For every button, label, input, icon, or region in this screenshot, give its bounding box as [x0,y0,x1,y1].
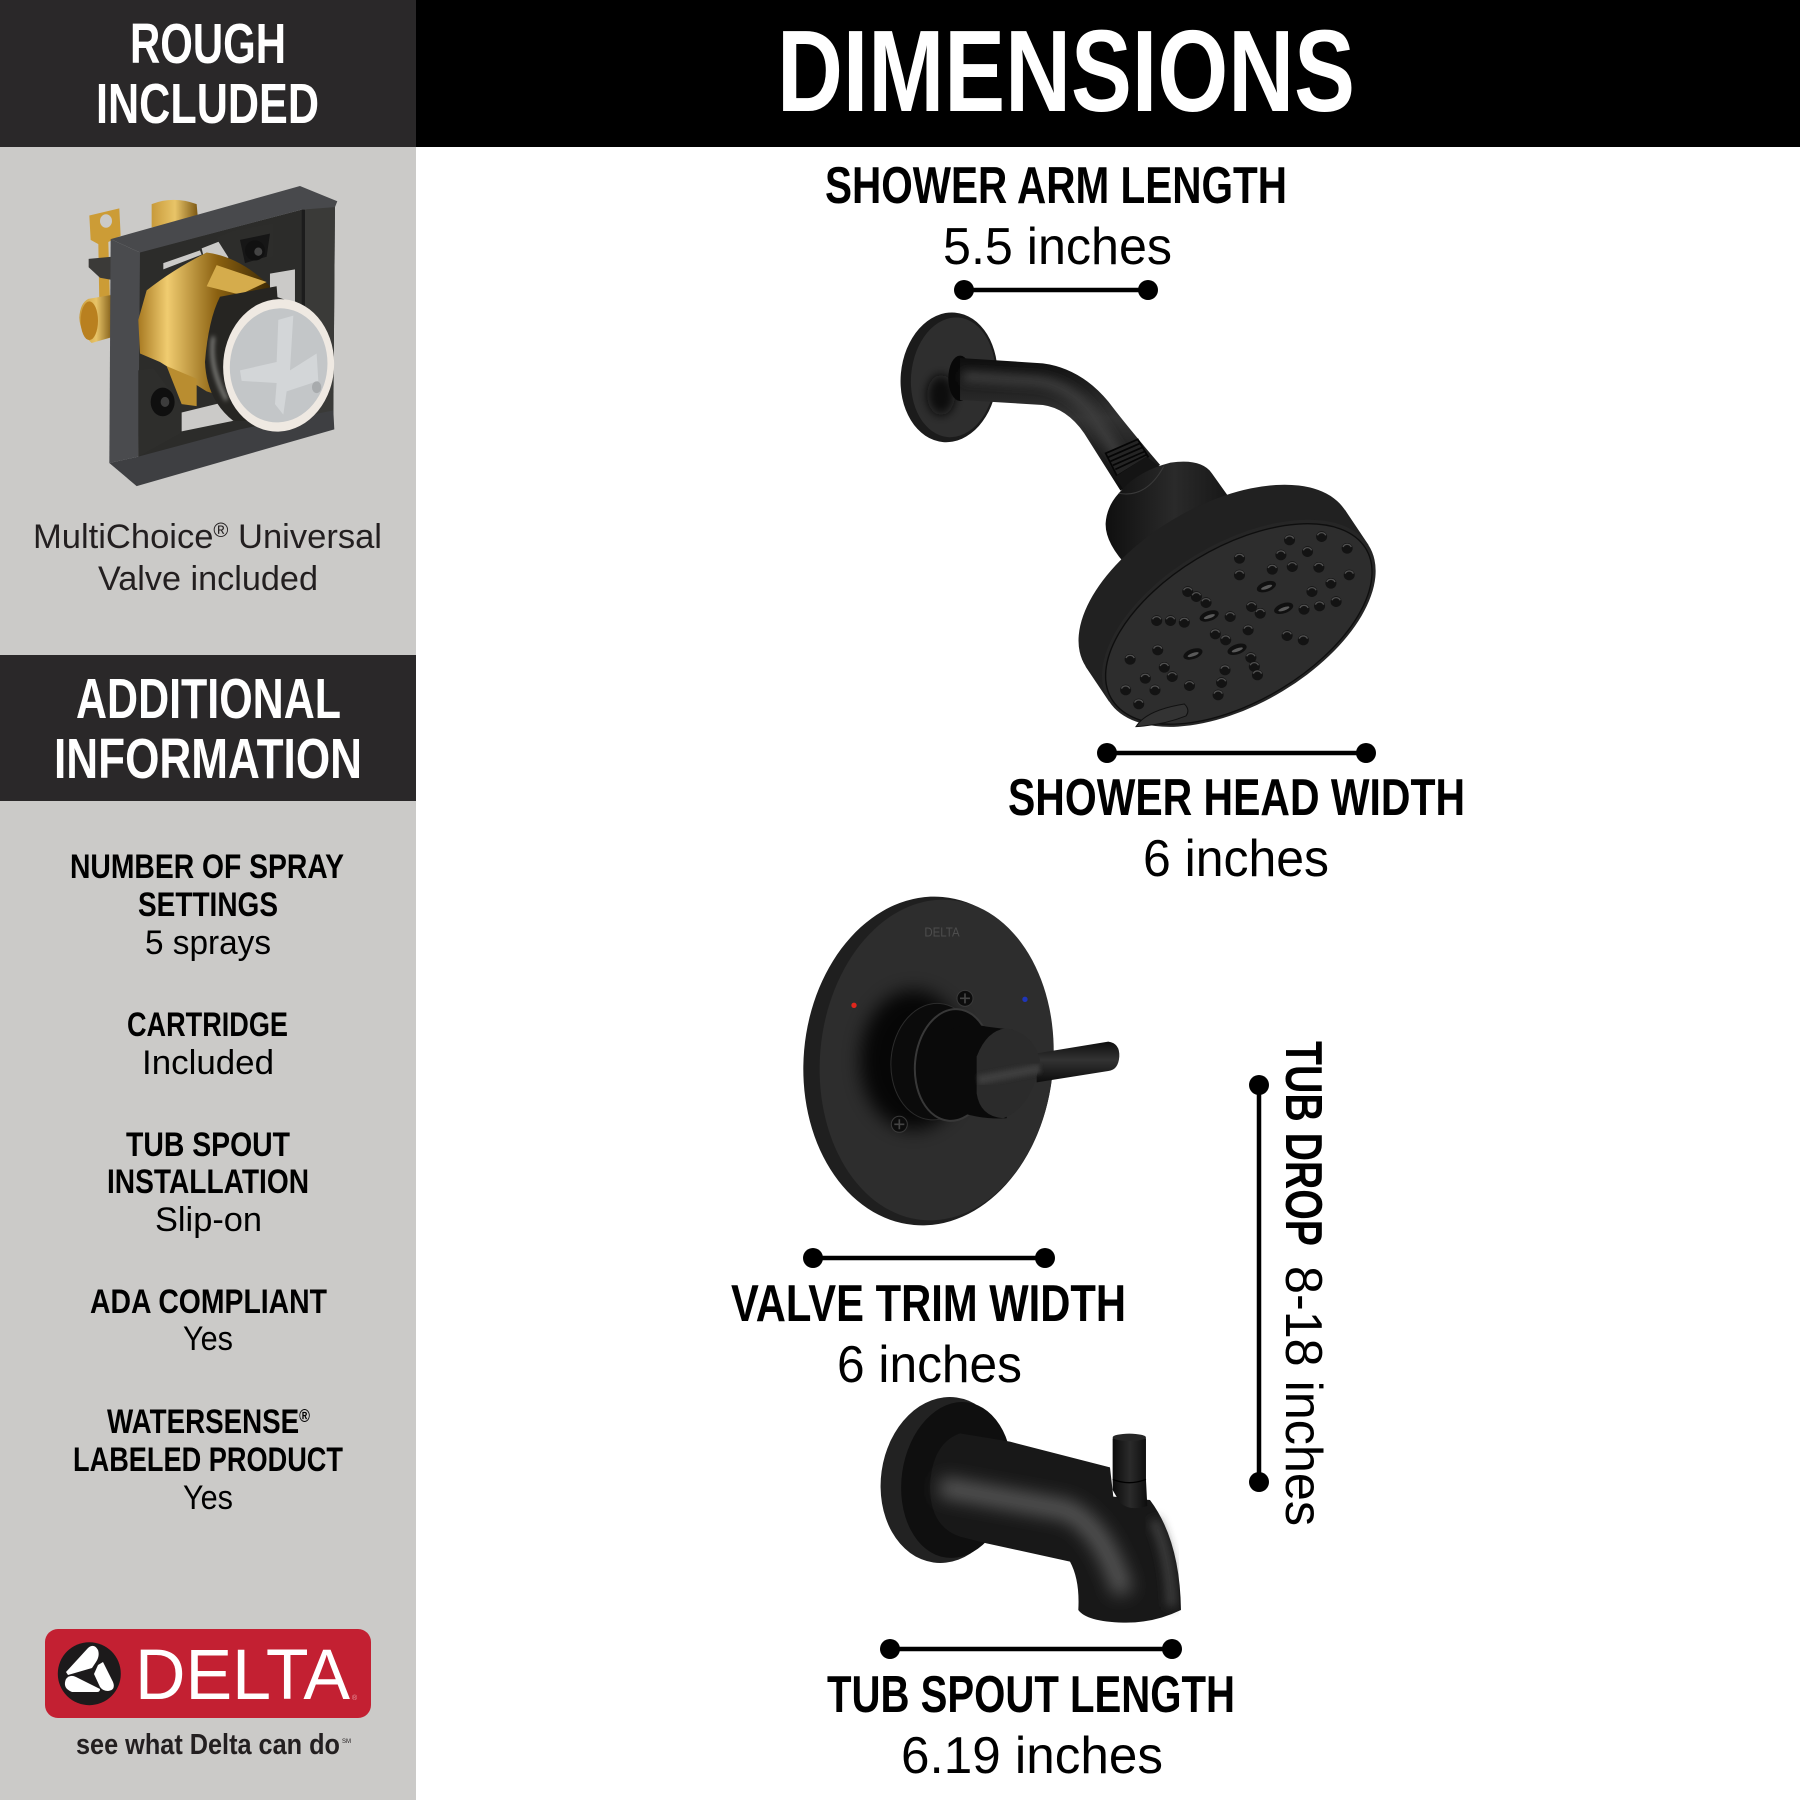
header bar: additional information: ADDITIONAL [76,667,341,731]
plate [790,886,1067,1236]
panel: left sidebar background [0,0,416,1800]
handle cap [977,1028,1040,1118]
silver ring [213,286,344,445]
caption: valve included [33,518,382,598]
header bar: rough included: INCLUDED [96,72,319,136]
label: shower head width: SHOWER HEAD WIDTH [1008,769,1465,827]
header bar: dimensions title: DIMENSIONS [777,6,1355,136]
spec: ada compliant: ADA COMPLIANT [90,1283,327,1321]
collar [1106,462,1231,568]
dimension line: tub spout [880,1639,1182,1659]
flange [895,309,1003,446]
caption: valve included: Valve included [98,560,318,598]
label: shower arm length: 5.5 inches [943,218,1172,276]
wall flange [870,1389,1020,1571]
label: tub drop [1274,1041,1332,1526]
caption: valve included: MultiChoice [33,518,211,556]
label: shower arm length: SHOWER ARM LENGTH [825,157,1287,215]
logo: delta: see what Delta can do [76,1729,340,1761]
label: valve trim width [731,1275,1126,1394]
logo: delta: SM [342,1739,351,1745]
spec: watersense labeled product: LABELED PRODUCT [73,1441,343,1479]
label: shower head width: 6 inches [1143,830,1329,888]
label: shower arm length [825,157,1287,276]
back brackets and pipes [152,200,198,227]
header bar: additional information [0,655,416,801]
logo: delta: ® [352,1694,358,1702]
logo: delta [45,1629,371,1761]
spec: tub spout installation [107,1126,309,1239]
spec: tub spout installation: Slip-on [155,1201,262,1239]
product image: shower arm and head [895,309,1412,769]
spec: number of spray settings: SETTINGS [138,886,278,924]
label: valve trim width: 6 inches [837,1336,1022,1394]
spec: number of spray settings [70,848,344,962]
head face [1070,483,1407,765]
selector tab [1136,704,1188,727]
header bar: rough included [0,0,416,147]
header bar: rough included: ROUGH [130,12,286,76]
spec: ada compliant: Yes [183,1320,233,1358]
product image: tub spout [870,1389,1181,1623]
plate logo: DELTA [924,926,960,940]
fittings [240,234,270,263]
handle barrel [928,1025,1013,1119]
label: tub spout length: 6.19 inches [901,1727,1163,1785]
spec: watersense labeled product: ® [299,1406,310,1426]
hot and cold markers [851,997,1028,1008]
label: tub spout length: TUB SPOUT LENGTH [827,1666,1235,1724]
spec: cartridge [127,1006,288,1082]
threads [1106,439,1148,476]
spec: number of spray settings: 5 sprays [145,924,271,962]
spec: cartridge: CARTRIDGE [127,1006,288,1044]
frame walls [111,186,337,253]
label: shower head width [1008,769,1465,888]
escutcheon collar [886,1000,984,1124]
frame inner [138,206,335,459]
screws [891,990,973,1132]
product image: rough-in valve [79,186,344,486]
diverter knob [1113,1434,1147,1508]
caption: valve included: ® [213,520,229,542]
spec: tub spout installation: TUB SPOUT [126,1126,290,1164]
header bar: dimensions title [416,0,1800,147]
label: valve trim width: VALVE TRIM WIDTH [731,1275,1126,1333]
nozzles [1120,531,1355,709]
logo: delta: DELTA [135,1636,351,1715]
spec: watersense labeled product: Yes [183,1479,233,1517]
lever [1037,1042,1119,1082]
label: tub drop: 8-18 inches [1274,1266,1332,1526]
header bar: additional information: INFORMATION [54,727,362,791]
spec: cartridge: Included [142,1044,274,1082]
dimension line: shower head [1097,743,1376,763]
spout body [930,1433,1181,1623]
label: tub drop: TUB DROP [1274,1041,1332,1246]
spec: number of spray settings: NUMBER OF SPRAY [70,848,344,886]
head body [1086,510,1369,702]
dimension line: tub drop [1249,1075,1269,1492]
label: tub spout length [827,1666,1235,1785]
black band [205,286,287,421]
arm [960,358,1160,491]
caption: valve included: Universal [228,518,382,556]
cross moulding [240,316,318,415]
spec: watersense labeled product: WATERSENSE [107,1403,343,1441]
spec: ada compliant [90,1283,327,1358]
spec: watersense labeled product [73,1403,343,1517]
dimension line: shower arm [954,280,1158,300]
brass body [138,253,270,400]
spec: tub spout installation: INSTALLATION [107,1163,309,1201]
dimension line: valve trim [803,1248,1055,1268]
product image: valve trim [790,886,1119,1236]
